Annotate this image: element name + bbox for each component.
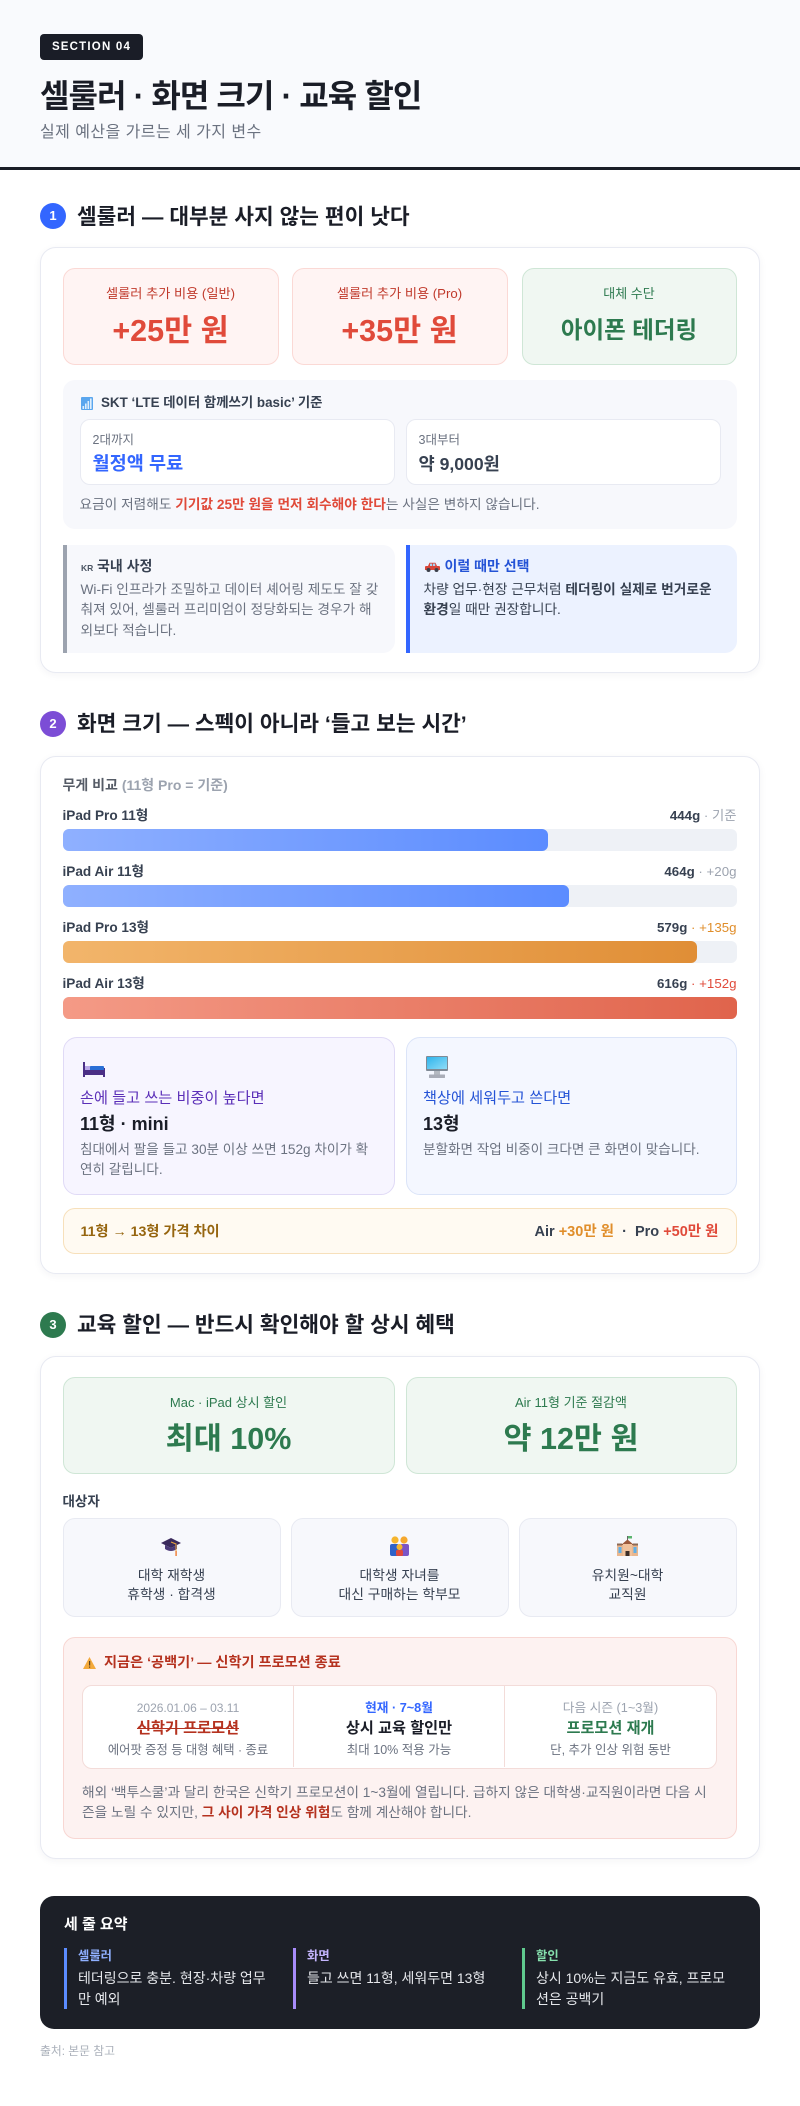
summary: cellular: 만 예외: [78, 1991, 121, 2007]
column: current: [294, 1686, 505, 1766]
plan tile: two lines: 2대까지: [92, 432, 134, 446]
icon: signal bars: [81, 397, 93, 410]
callout heading: 국내 사정: [97, 558, 152, 574]
tip heading: 책상에 세워두고 쓴다면: [423, 1090, 571, 1106]
bar: iPad Pro 13: [62, 920, 737, 963]
plan tile: two lines: 월정액 무료: [92, 452, 183, 474]
section 1 heading: 셀룰러 — 대부분 사지 않는 편이 낫다: [77, 205, 410, 229]
stat: discount rate: [62, 1376, 394, 1474]
summary title: 세 줄 요약: [64, 1916, 128, 1933]
column: past: 신학기 프로모션: [137, 1720, 239, 1736]
stat: general cost: [62, 268, 278, 364]
callout: domestic: [62, 544, 394, 652]
tile text: 대신 구매하는 학부모: [339, 1586, 460, 1602]
eligibility tile: staff: [518, 1518, 736, 1616]
column: next: 단, 추가 인상 위험 동반: [550, 1742, 671, 1756]
tip text: 연히 갈립니다.: [80, 1162, 163, 1176]
tile text: 대학생 자녀를: [360, 1568, 440, 1582]
icon: school: [617, 1536, 638, 1556]
stat: savings: 약 12만 원: [503, 1422, 639, 1456]
stat: discount rate: Mac · iPad 상시 할인: [170, 1394, 287, 1410]
tip text: 침대에서 팔을 들고 30분 이상 쓰면 152g 차이가 확: [80, 1142, 368, 1156]
callout body: 외보다 적습니다.: [80, 622, 176, 638]
tip card: desk: [406, 1036, 736, 1194]
plan tile: two lines: [80, 418, 394, 484]
bar: iPad Air 11: 464g · +20g: [664, 864, 736, 879]
section 3 number badge: [40, 1312, 66, 1338]
callout body: [424, 582, 712, 617]
title: 셀룰러 · 화면 크기 · 교육 할인: [40, 78, 421, 114]
callout: when to choose: [406, 544, 736, 652]
data plan box: [62, 380, 736, 528]
stat: savings: [406, 1376, 736, 1474]
summary: discount: 상시 10%는 지금도 유효, 프로모: [536, 1970, 725, 1986]
tile text: 교직원: [608, 1586, 647, 1602]
summary: cellular: 셀룰러: [78, 1949, 112, 1963]
stat: savings: Air 11형 기준 절감액: [515, 1394, 627, 1410]
bar: iPad Air 13: iPad Air 13형: [62, 976, 145, 991]
icon: graduation cap: [161, 1538, 181, 1556]
bar: iPad Pro 13: 579g · +135g: [657, 920, 736, 935]
tile text: [592, 1568, 663, 1602]
section 1 number badge: [40, 203, 66, 229]
source note: 출처: 본문 참고: [40, 2044, 115, 2058]
summary panel: [40, 1896, 760, 2029]
summary: screen: 화면: [307, 1949, 330, 1963]
panel: screen size: [40, 756, 760, 1274]
stat: pro cost: +35만 원: [341, 314, 458, 348]
section 2 number badge: [40, 711, 66, 737]
warning heading: 지금은 ‘공백기’ — 신학기 프로모션 종료: [104, 1654, 341, 1670]
column: next: [550, 1700, 671, 1756]
panel: cellular: [40, 247, 760, 673]
tip value: 11형 · mini: [80, 1114, 169, 1134]
plan heading: SKT ‘LTE 데이터 함께쓰기 basic’ 기준: [101, 394, 322, 410]
column: past: [83, 1686, 294, 1766]
section badge: SECTION 04: [52, 41, 131, 53]
icon: car: [425, 562, 440, 572]
warning note: 즌을 노릴 수 있지만, 그 사이 가격 인상 위험도 함께 계산해야 합니다.: [82, 1804, 471, 1820]
section badge: [40, 34, 143, 60]
column: current: 상시 교육 할인만: [346, 1720, 452, 1736]
section 1 number badge: 1: [49, 208, 57, 223]
callout body: [80, 582, 378, 638]
warning box: [62, 1636, 736, 1838]
summary: screen: [293, 1948, 508, 2009]
bar: iPad Pro 11: iPad Pro 11형: [62, 808, 148, 823]
warning note: 해외 ‘백투스쿨’과 달리 한국은 신학기 프로모션이 1~3월에 열립니다. 급하지 않은 대학생·교직원이라면 다음 시: [82, 1784, 707, 1800]
column: next: 프로모션 재개: [566, 1720, 655, 1736]
plan note: 요금이 저렴해도 기기값 25만 원을 먼저 회수해야 한다는 사실은 변하지 않습니다.: [80, 496, 540, 512]
column: past: 2026.01.06 – 03.11: [137, 1700, 239, 1714]
stat: general cost: +25만 원: [112, 314, 229, 348]
summary: cellular: 테더링으로 충분. 현장·차량 업무: [78, 1970, 266, 1986]
tip text: 분할화면 작업 비중이 크다면 큰 화면이 맞습니다.: [423, 1142, 700, 1156]
header band: [0, 0, 800, 170]
stat: pro cost: [292, 268, 508, 364]
column: current: 최대 10% 적용 가능: [347, 1742, 451, 1756]
bar: iPad Pro 11: [62, 808, 737, 851]
summary: cellular: [64, 1948, 279, 2009]
panel: education discount: [40, 1356, 760, 1859]
subtitle: 실제 예산을 가르는 세 가지 변수: [40, 124, 262, 141]
eligibility label: 대상자: [62, 1494, 100, 1508]
callout body: 환경일 때만 권장합니다.: [424, 602, 561, 617]
bar: iPad Air 11: [62, 864, 737, 907]
plan tile: three lines: 3대부터: [418, 432, 460, 446]
stat: alternative: 아이폰 테더링: [561, 316, 697, 342]
callout heading: 이럴 때만 선택: [444, 558, 530, 574]
tip value: 13형: [423, 1114, 460, 1134]
section 2 heading: 화면 크기 — 스펙이 아니라 ‘들고 보는 시간’: [77, 712, 467, 736]
plan tile: three lines: [406, 418, 720, 484]
bar: iPad Air 13: [62, 976, 737, 1019]
summary: discount: 할인: [536, 1949, 559, 1963]
stat: general cost: 셀룰러 추가 비용 (일반): [106, 286, 235, 300]
callout body: 춰져 있어, 셀룰러 프리미엄이 정당화되는 경우가 해: [80, 602, 372, 617]
warning note: [82, 1784, 707, 1820]
tile text: 유치원~대학: [592, 1568, 663, 1582]
tile text: 대학 재학생: [138, 1568, 205, 1582]
icon: KR flag fallback: KR: [81, 562, 93, 572]
bar: iPad Air 13: 616g · +152g: [657, 976, 736, 991]
price difference strip: Air +30만 원 · Pro +50만 원: [535, 1224, 718, 1240]
stat: alternative: 대체 수단: [603, 286, 655, 300]
callout body: 차량 업무·현장 근무처럼 테더링이 실제로 번거로운: [424, 582, 712, 596]
section 2 number badge: 2: [49, 716, 57, 731]
tip heading: 손에 들고 쓰는 비중이 높다면: [80, 1090, 265, 1106]
promotion timeline table: [82, 1684, 717, 1768]
section 3 number badge: 3: [49, 1317, 57, 1332]
price difference strip: [62, 1208, 736, 1254]
eligibility tile: parents: [290, 1518, 508, 1616]
icon: bed: [83, 1062, 105, 1077]
tile text: [127, 1568, 216, 1602]
bar: iPad Pro 13: iPad Pro 13형: [62, 920, 149, 935]
stat: alternative: [522, 268, 736, 364]
bar: iPad Air 11: iPad Air 11형: [62, 864, 144, 879]
summary: screen: 들고 쓰면 11형, 세워두면 13형: [307, 1970, 485, 1986]
column: past: 에어팟 증정 등 대형 혜택 · 종료: [108, 1742, 268, 1756]
tile text: [339, 1568, 460, 1602]
callout body: Wi-Fi 인프라가 조밀하고 데이터 셰어링 제도도 잘 갖: [80, 582, 378, 596]
eligibility tile: students: [62, 1518, 280, 1616]
weight chart heading: 무게 비교 (11형 Pro = 기준): [62, 777, 228, 793]
tip text: [80, 1142, 368, 1176]
stat: pro cost: 셀룰러 추가 비용 (Pro): [337, 286, 462, 300]
icon: family: [390, 1536, 409, 1556]
stat: discount rate: 최대 10%: [166, 1422, 291, 1456]
section 3 heading: 교육 할인 — 반드시 확인해야 할 상시 혜택: [77, 1313, 455, 1337]
tip card: handheld: [62, 1036, 394, 1194]
plan tile: three lines: 약 9,000원: [418, 454, 500, 474]
column: next: 다음 시즌 (1~3월): [563, 1700, 658, 1714]
icon: desktop monitor: [426, 1056, 448, 1078]
summary: discount: [522, 1948, 737, 2009]
icon: warning: [83, 1657, 96, 1669]
column: current: 현재 · 7~8월: [365, 1700, 433, 1714]
price difference strip: 11형 → 13형 가격 차이: [80, 1224, 220, 1240]
summary: discount: 션은 공백기: [536, 1991, 604, 2007]
tile text: 휴학생 · 합격생: [127, 1586, 216, 1602]
bar: iPad Pro 11: 444g · 기준: [670, 808, 736, 823]
bar chart: [62, 808, 737, 1019]
